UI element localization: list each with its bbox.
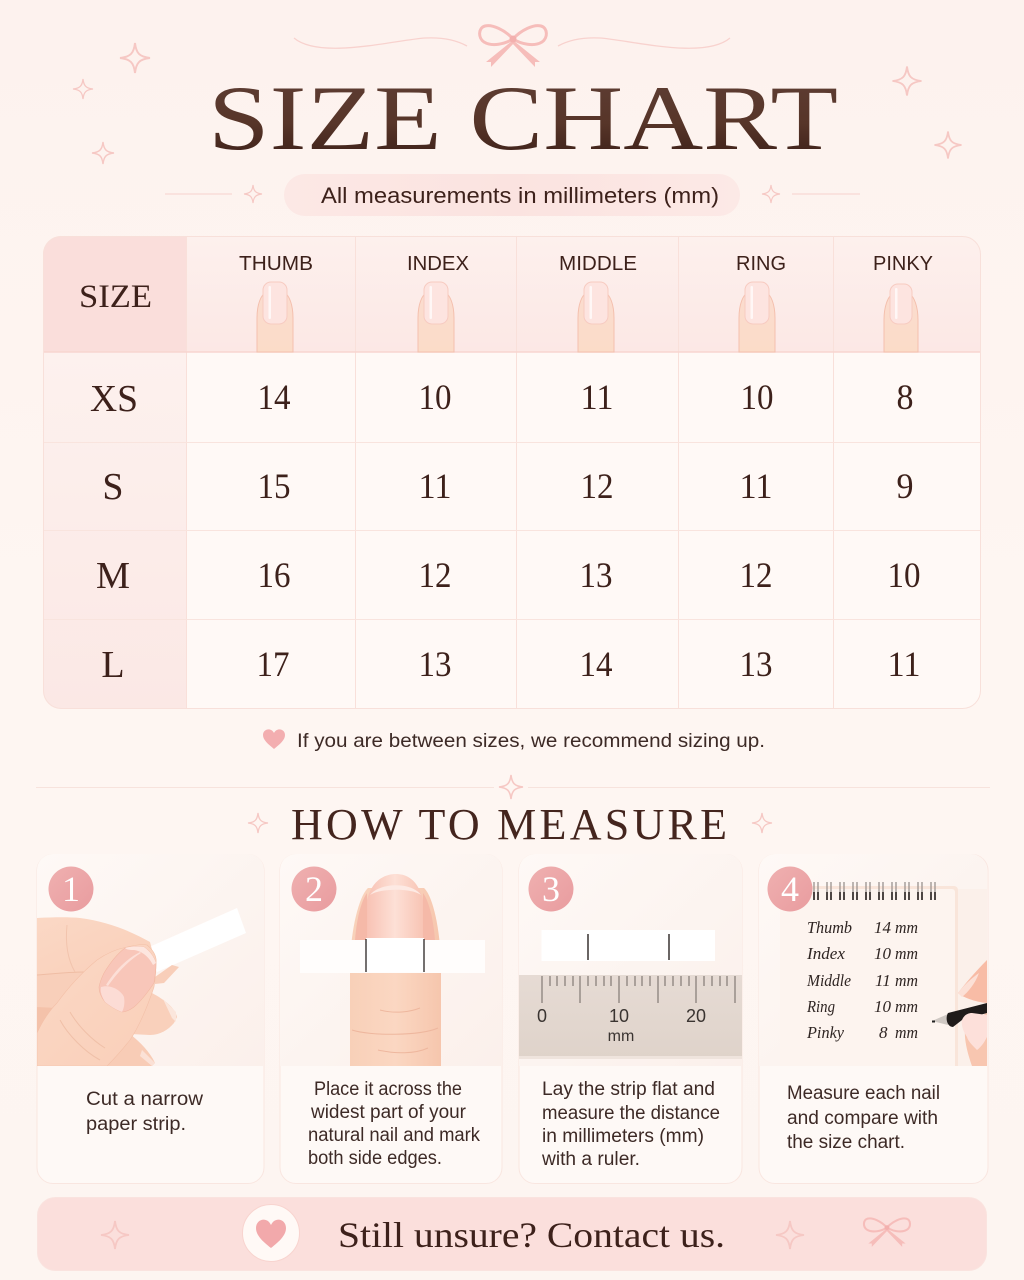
subtitle pill: All measurements in millimeters (mm) — [321, 183, 719, 208]
panel: step 3 — [519, 854, 742, 1184]
illustration: strip and ruler: mm — [608, 1028, 634, 1045]
step 1 text: paper strip. — [86, 1114, 186, 1135]
illustration: notebook with measurements: Ring — [806, 997, 835, 1016]
column: index: INDEX — [407, 253, 469, 275]
step 2 text: Place it across the — [314, 1079, 462, 1100]
step 1 number badge: 1 — [62, 869, 80, 909]
row M: 12 — [740, 555, 772, 595]
step 3 number badge — [528, 866, 574, 912]
illustration: notebook with measurements: mm — [895, 1023, 918, 1042]
illustration: notebook with measurements: 8 — [879, 1023, 888, 1042]
illustration: notebook with measurements: 10 — [874, 997, 892, 1016]
column: thumb: THUMB — [239, 253, 313, 275]
row L — [101, 644, 920, 686]
step 3 text — [541, 1079, 720, 1170]
step 2 text: both side edges. — [308, 1148, 442, 1169]
contact text: Still unsure? Contact us. — [338, 1215, 725, 1255]
panel: step 2 — [280, 854, 502, 1184]
illustration: notebook with measurements: 10 — [874, 944, 892, 963]
icon: heart badge — [242, 1204, 300, 1262]
panel: step 4 — [759, 854, 988, 1184]
step 3 text: Lay the strip flat and — [542, 1079, 715, 1100]
illustration: notebook with measurements: 11 — [875, 971, 891, 990]
contact banner — [38, 1198, 986, 1270]
column: index — [407, 253, 469, 352]
step 2 text: widest part of your — [310, 1102, 467, 1123]
step 2 number badge — [292, 866, 336, 912]
heading: how to measure: HOW TO MEASURE — [291, 800, 727, 849]
subtitle pill — [165, 174, 860, 216]
illustration: notebook with measurements — [759, 854, 988, 1079]
illustration: notebook with measurements: mm — [895, 918, 918, 937]
row M: 12 — [418, 555, 452, 595]
row S: 11 — [740, 466, 772, 506]
row L: L — [101, 644, 125, 686]
column: middle: MIDDLE — [559, 253, 637, 275]
column: pinky: PINKY — [873, 253, 933, 275]
step 4 number badge: 4 — [781, 869, 799, 909]
row L: 17 — [256, 644, 290, 684]
row L: 14 — [580, 644, 612, 684]
row S — [102, 466, 914, 508]
step 4 text: Measure each nail — [787, 1083, 940, 1104]
row M: 16 — [258, 555, 290, 595]
illustration: notebook with measurements: Pinky — [806, 1023, 844, 1042]
illustration: notebook with measurements: mm — [895, 997, 918, 1016]
step 3 text: measure the distance — [542, 1103, 720, 1124]
row S: 15 — [258, 466, 290, 506]
row XS: 10 — [740, 377, 774, 417]
row XS: 14 — [258, 377, 290, 417]
step 4 text: the size chart. — [787, 1132, 905, 1153]
step 3 text: in millimeters (mm) — [542, 1126, 704, 1147]
row L: 11 — [888, 644, 920, 684]
illustration: strip and ruler: 0 — [537, 1006, 547, 1026]
step 2 number badge: 2 — [305, 869, 323, 909]
row S: S — [102, 466, 124, 508]
column: ring: RING — [736, 253, 786, 275]
row XS — [90, 377, 914, 420]
illustration: notebook with measurements: Middle — [806, 971, 851, 990]
column: ring — [736, 253, 786, 352]
step 4 number badge — [768, 866, 812, 912]
step 4 text: and compare with — [787, 1108, 938, 1129]
section divider — [36, 775, 990, 799]
illustration: strip and ruler: 10 — [609, 1006, 629, 1026]
row M: 10 — [888, 555, 920, 595]
panel: step 1 — [37, 854, 264, 1184]
row S: 9 — [896, 466, 914, 506]
illustration: strip across nail — [280, 854, 502, 1066]
step 4 text — [787, 1083, 940, 1153]
illustration: notebook with measurements: Thumb — [807, 918, 852, 937]
row XS: 8 — [896, 377, 914, 417]
illustration: strip and ruler: 20 — [686, 1006, 706, 1026]
row S: 12 — [580, 466, 614, 506]
row XS: XS — [90, 378, 138, 420]
illustration: notebook with measurements: Index — [806, 944, 845, 963]
step 1 text — [86, 1089, 203, 1135]
column: thumb — [239, 253, 313, 352]
step 2 text — [308, 1079, 480, 1169]
step 3 text: with a ruler. — [541, 1149, 640, 1170]
size table — [43, 236, 981, 709]
row XS: 11 — [580, 377, 614, 417]
row M — [96, 555, 920, 597]
step 1 number badge — [48, 866, 94, 912]
step 2 text: natural nail and mark — [308, 1125, 480, 1146]
illustration: strip and ruler — [519, 854, 742, 1066]
icon: bow — [864, 1218, 910, 1247]
column: middle — [559, 253, 637, 352]
row S: 11 — [418, 466, 452, 506]
title: SIZE CHART — [208, 67, 838, 169]
row M: M — [96, 555, 130, 597]
table header: SIZE: SIZE — [79, 279, 152, 315]
row XS: 10 — [418, 377, 452, 417]
illustration: notebook with measurements: 14 — [874, 918, 892, 937]
decorative sparkles — [73, 43, 962, 164]
step 3 number badge: 3 — [542, 869, 560, 909]
illustration: notebook with measurements: mm — [895, 971, 918, 990]
illustration: notebook with measurements: mm — [895, 944, 918, 963]
row L: 13 — [740, 644, 772, 684]
column: pinky — [873, 253, 933, 352]
row L: 13 — [418, 644, 452, 684]
sizing note with heart: If you are between sizes, we recommend sizing up. — [297, 730, 765, 752]
illustration: hand holding paper strip — [37, 854, 264, 1066]
row M: 13 — [580, 555, 612, 595]
header decoration: bow and swirls — [294, 26, 730, 67]
step 1 text: Cut a narrow — [86, 1089, 203, 1110]
